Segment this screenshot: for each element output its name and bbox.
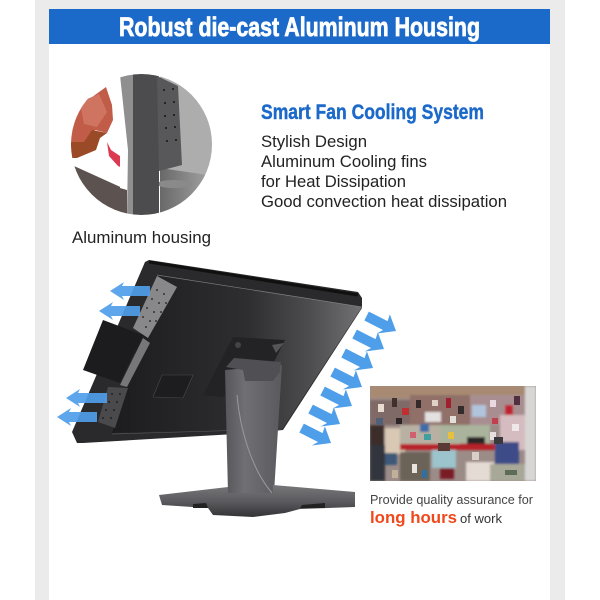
monitor rear view (72, 260, 362, 517)
arrows: exhaust left (57, 282, 150, 426)
lower vent panel (98, 387, 128, 428)
rear window cut-out (153, 375, 193, 398)
upper vent panel (133, 276, 177, 338)
side box (83, 320, 143, 383)
hinge (226, 358, 281, 381)
middle strip (120, 338, 150, 387)
heading: Smart Fan Cooling System: Smart Fan Cooling System (261, 101, 484, 124)
arrows: intake right (297, 305, 401, 453)
caption: quality assurance: Provide quality assurance for (370, 492, 534, 507)
base (159, 485, 355, 517)
photo: supermarket checkout crowd (370, 386, 536, 481)
monitor body (72, 260, 362, 443)
feature text block: Stylish Design (261, 132, 367, 151)
feature text block: for Heat Dissipation (261, 172, 406, 191)
caption: Aluminum housing: Aluminum housing (72, 228, 211, 247)
column accent line (237, 395, 272, 493)
stand column (225, 365, 282, 493)
caption: quality assurance: of work (460, 511, 502, 526)
caption: quality assurance: long hours (370, 508, 457, 527)
feature text block: Good convection heat dissipation (261, 192, 507, 211)
caption: quality assurance (370, 492, 534, 527)
feature text block (261, 132, 507, 211)
title banner: Robust die-cast Aluminum Housing (119, 12, 480, 42)
icon: circular housing close-up photo (70, 73, 215, 218)
VESA plate (203, 337, 285, 397)
feature text block: Aluminum Cooling fins (261, 152, 427, 171)
